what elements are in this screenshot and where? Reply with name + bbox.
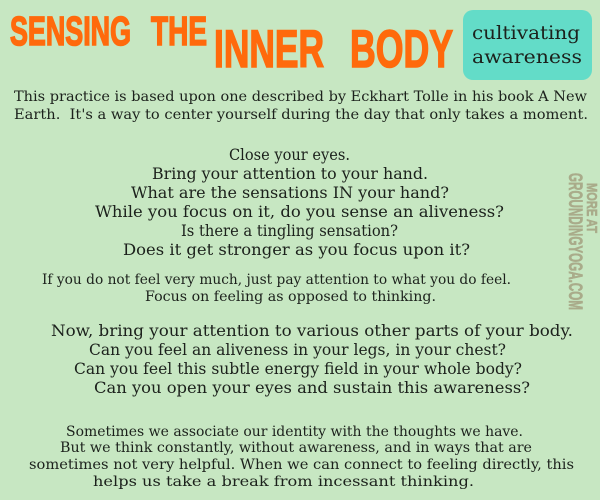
instructions: whole body: Can you feel this subtle energy field in your whole body? — [74, 360, 522, 378]
instructions: hand: Bring your attention to your hand. — [152, 165, 428, 183]
note: feeling vs thinking — [42, 272, 511, 305]
title: SENSING — [10, 8, 131, 54]
badge: cultivating awareness — [463, 10, 592, 80]
closing paragraph: sometimes not very helpful. When we can connect to feeling directly, this — [29, 457, 574, 473]
instructions: hand: What are the sensations IN your hand? — [131, 184, 449, 202]
intro text: This practice is based upon one described by Eckhart Tolle in his book A New — [14, 89, 587, 105]
closing paragraph: But we think constantly, without awareness, and in ways that are — [60, 440, 532, 456]
side note: more at groundingyoga.com: MORE AT — [583, 183, 600, 233]
title: INNER — [214, 20, 324, 79]
closing paragraph: Sometimes we associate our identity with the thoughts we have. — [66, 424, 523, 440]
side note: more at groundingyoga.com: GROUNDINGYOGA.COM — [564, 173, 585, 310]
instructions: hand: While you focus on it, do you sense an aliveness? — [95, 203, 504, 221]
instructions: whole body: Can you open your eyes and sustain this awareness? — [94, 379, 530, 397]
intro text — [14, 89, 588, 123]
instructions: whole body: Now, bring your attention to various other parts of your body. — [51, 322, 573, 340]
note: feeling vs thinking: If you do not feel very much, just pay attention to what you do feel. — [42, 272, 511, 288]
instructions: hand: Is there a tingling sensation? — [181, 222, 398, 240]
closing paragraph — [29, 424, 574, 490]
title: THE — [151, 8, 207, 54]
instructions: hand — [95, 146, 504, 259]
badge: cultivating awareness: cultivating — [472, 22, 580, 44]
intro text: Earth. It's a way to center yourself during the day that only takes a moment. — [14, 107, 588, 123]
title — [10, 8, 453, 79]
instructions: whole body: Can you feel an aliveness in your legs, in your chest? — [89, 341, 506, 359]
title: BODY — [350, 20, 453, 79]
note: feeling vs thinking: Focus on feeling as opposed to thinking. — [145, 289, 436, 305]
instructions: hand: Does it get stronger as you focus upon it? — [123, 241, 470, 259]
closing paragraph: helps us take a break from incessant thinking. — [93, 474, 474, 490]
badge: cultivating awareness: awareness — [472, 46, 582, 68]
side note: more at groundingyoga.com — [564, 173, 600, 310]
instructions: hand: Close your eyes. — [229, 146, 350, 164]
instructions: whole body — [51, 322, 573, 397]
